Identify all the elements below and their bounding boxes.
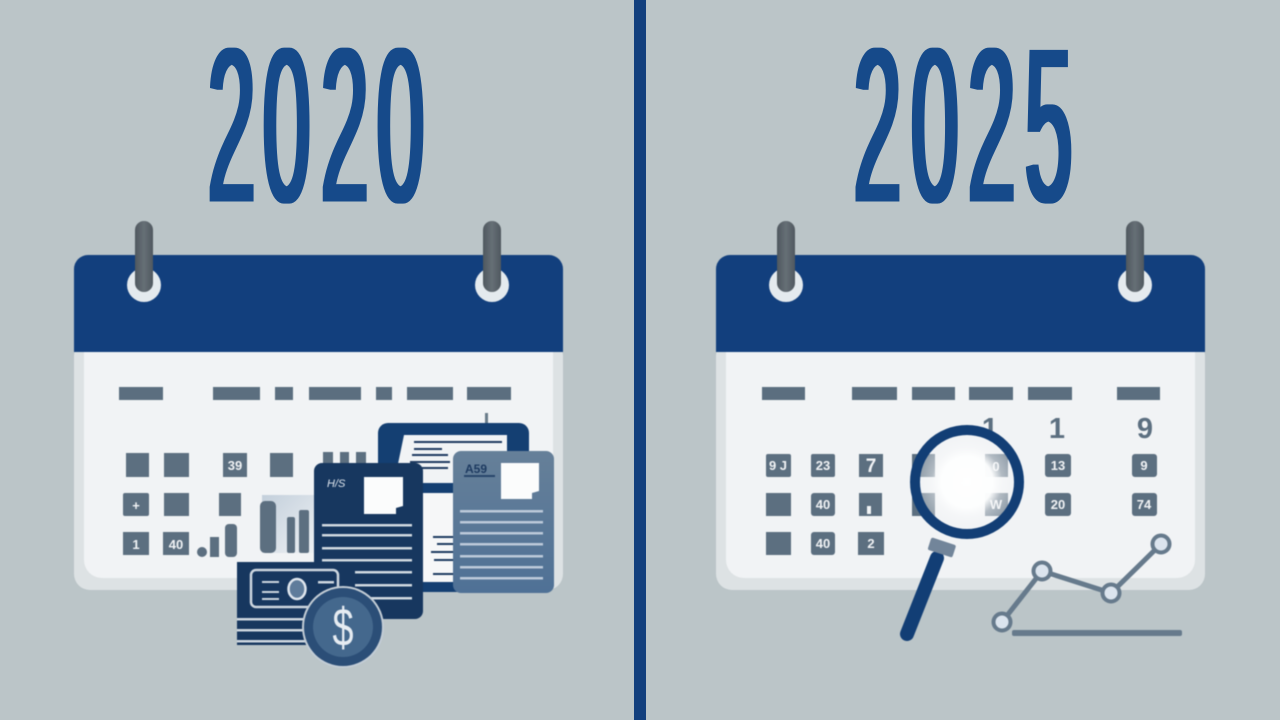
heading: 2025: 2025 — [854, 5, 1072, 248]
large bar chart — [260, 495, 317, 553]
weekday header bars — [762, 387, 1160, 400]
date cells: 0 — [992, 459, 1000, 474]
tablet document — [378, 413, 529, 592]
date cells: 40 — [169, 537, 183, 552]
panel: 2020 — [74, 5, 563, 668]
dollar coin: $ — [332, 597, 354, 658]
date cells: 40 — [816, 497, 830, 512]
navy document — [314, 463, 423, 619]
steel document: A59 — [465, 462, 487, 476]
magnifying glass — [907, 430, 1019, 634]
date cells — [766, 454, 1157, 555]
calendar ring left — [127, 221, 161, 302]
calendar ring right — [475, 221, 509, 302]
steel document — [453, 451, 554, 593]
line chart — [994, 536, 1182, 636]
weekday header bars — [119, 387, 511, 400]
date cells: 23 — [816, 458, 830, 473]
date cells: 40 — [816, 536, 830, 551]
date cells: 9 J — [769, 458, 787, 473]
date cells: + — [132, 498, 140, 513]
date cells: 9 — [1140, 458, 1148, 473]
dollar coin — [302, 586, 384, 668]
small bar chart — [197, 524, 237, 557]
date cells — [123, 452, 366, 555]
top row numerals: 9 — [1137, 413, 1153, 445]
calendar ring right — [1118, 221, 1152, 302]
date cells: 2 — [867, 536, 875, 551]
banknote stack — [237, 562, 355, 645]
navy document: H/S — [327, 478, 346, 490]
top row numerals: 1 — [982, 413, 998, 445]
top row numerals — [982, 413, 1153, 445]
date cells: 20 — [1051, 497, 1065, 512]
calendar: 2020 — [74, 221, 563, 668]
heading: 2020: 2020 — [208, 5, 424, 248]
calendar: 2025 — [716, 221, 1205, 636]
date cells: 13 — [1051, 458, 1065, 473]
date cells: 7 — [866, 456, 876, 477]
date cells: W — [990, 497, 1003, 512]
top row numerals: 1 — [1049, 413, 1065, 445]
center divider — [634, 0, 646, 720]
panel: 2025 — [716, 5, 1205, 636]
date cells: 39 — [228, 458, 242, 473]
date cells: 1 — [132, 537, 140, 552]
date cells: 74 — [1137, 497, 1152, 512]
calendar ring left — [769, 221, 803, 302]
